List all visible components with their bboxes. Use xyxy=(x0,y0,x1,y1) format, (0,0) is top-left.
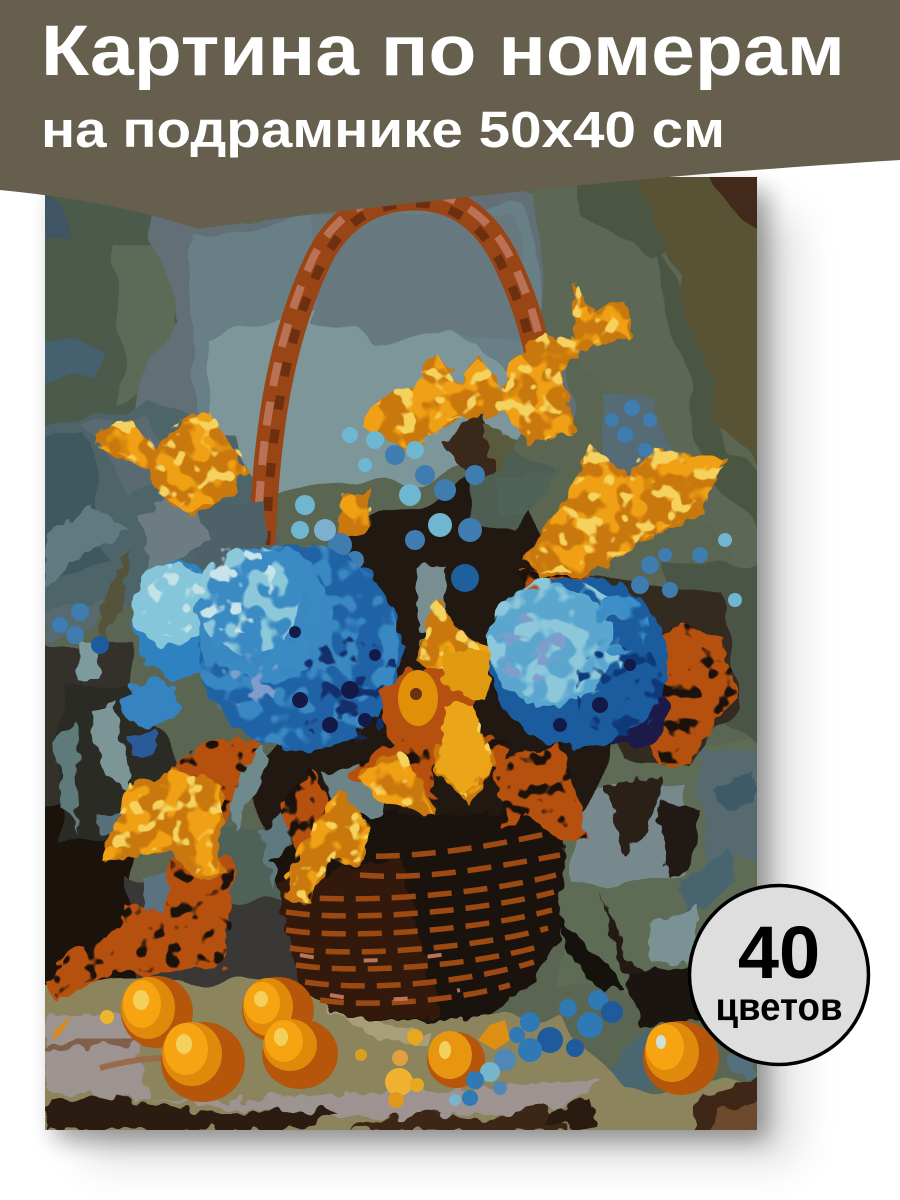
oranges on the table xyxy=(52,976,719,1108)
painting: basket with hydrangeas and oranges xyxy=(20,165,770,1140)
orange sprays xyxy=(45,570,740,1000)
badge: 40 colours: 40 xyxy=(738,911,820,994)
right hydrangea xyxy=(488,577,668,747)
fallen blue berries xyxy=(449,990,623,1106)
badge: 40 colours: цветов xyxy=(716,986,842,1029)
title: Картина по номерам xyxy=(41,12,845,91)
subtitle: на подрамнике 50х40 см xyxy=(41,101,725,158)
dark foliage mass behind the flowers xyxy=(60,440,740,840)
header banner xyxy=(0,0,900,229)
yellow mimosa clusters xyxy=(97,283,725,905)
painting background: muted wall xyxy=(20,165,770,1000)
blue berries xyxy=(52,400,742,654)
basket handle xyxy=(257,192,550,545)
canvas drop shadow xyxy=(55,190,795,1160)
table cloth xyxy=(30,982,770,1140)
yellow spray over fruit xyxy=(440,650,490,795)
wicker basket xyxy=(272,815,568,1020)
center orange fruit xyxy=(381,668,475,744)
left hydrangea xyxy=(122,545,400,759)
blue-grey and dark leaves xyxy=(45,408,757,1095)
badge: 40 colours xyxy=(690,886,868,1064)
